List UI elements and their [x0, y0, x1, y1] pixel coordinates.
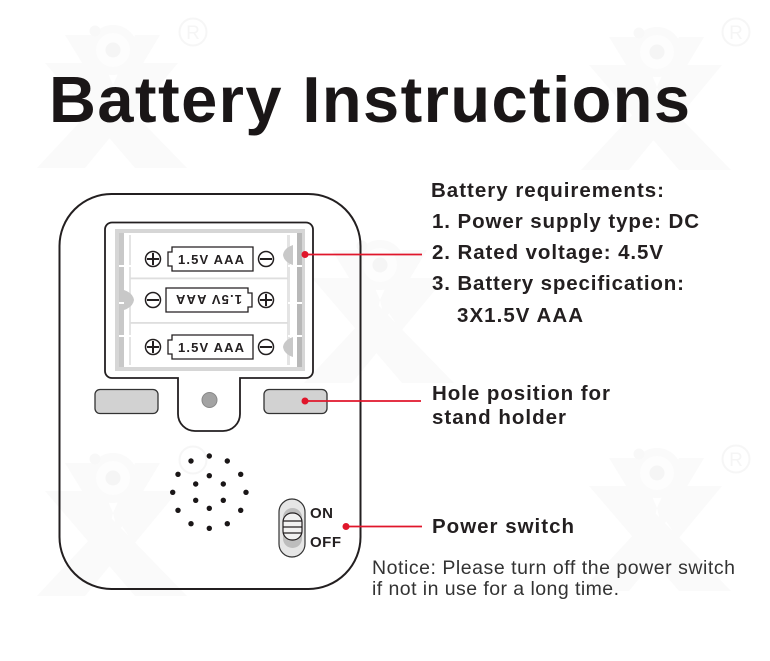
battery requirements text: 3. Battery specification:: [432, 272, 684, 295]
switch label: on: ON: [310, 505, 333, 522]
watermark logos: R: [186, 23, 200, 44]
watermark logos: R: [729, 450, 743, 471]
device illustration: [60, 194, 360, 589]
power slide switch: [279, 499, 305, 557]
battery 2: 1.5V AAA: [175, 292, 242, 307]
callout line: power switch: [342, 523, 422, 530]
device body: [60, 194, 360, 589]
battery 2: [146, 288, 274, 312]
screw hole: [202, 392, 217, 408]
callout line: battery compartment: [302, 251, 422, 258]
switch label: off: OFF: [310, 534, 341, 551]
battery requirements text: [431, 179, 699, 327]
notice: [372, 557, 735, 600]
battery requirements text: 1. Power supply type: DC: [432, 210, 699, 233]
notice: Notice: Please turn off the power switch: [372, 557, 735, 579]
stand holder label: [432, 382, 610, 429]
power switch label: Power switch: [432, 515, 574, 538]
stand holder label: Hole position for: [432, 382, 610, 405]
speaker holes: [170, 453, 249, 531]
notice: if not in use for a long time.: [372, 578, 619, 600]
left stand holder hole: [95, 390, 158, 414]
battery 3: 1.5V AAA: [178, 340, 245, 355]
battery 1: 1.5V AAA: [178, 252, 245, 267]
battery requirements text: 2. Rated voltage: 4.5V: [432, 241, 663, 264]
right stand holder hole: [264, 390, 327, 414]
title: Battery Instructions: [49, 63, 690, 136]
callout line: stand holder: [302, 398, 421, 404]
battery compartment: [105, 222, 313, 431]
watermark logos: R: [729, 23, 743, 44]
battery 1: [146, 247, 274, 271]
battery 3: [146, 335, 274, 359]
stand holder label: stand holder: [432, 406, 566, 429]
battery requirements text: 3X1.5V AAA: [457, 304, 583, 327]
battery requirements text: Battery requirements:: [431, 179, 664, 202]
